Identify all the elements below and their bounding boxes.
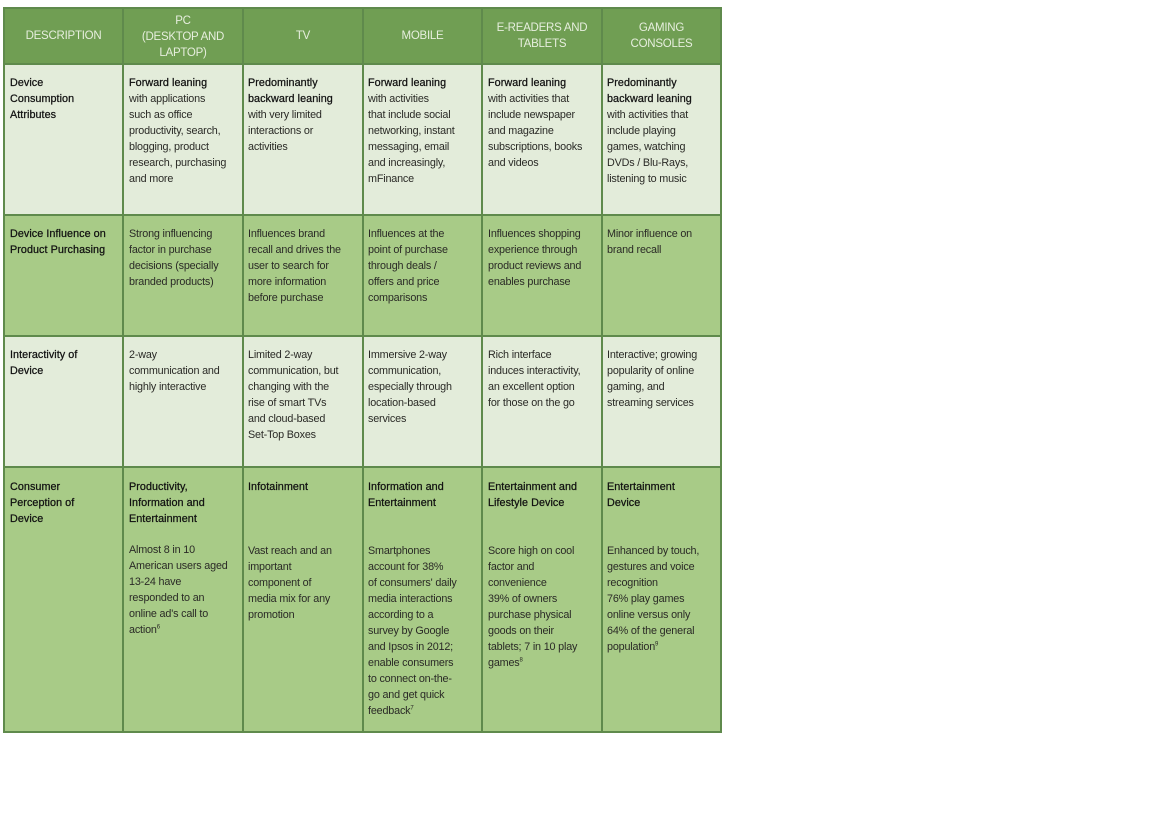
cell: TV interactivity (244, 337, 362, 466)
cell: TV interactivity: rise of smart TVs (248, 397, 326, 409)
cell: gaming consumption: listening to music (607, 173, 687, 185)
cell: TV influence: Influences brand (248, 228, 325, 240)
cell: tablets influence (483, 216, 601, 335)
cell: mobile perception: enable consumers (368, 657, 453, 669)
cell: tablets consumption (483, 65, 601, 214)
cell: mobile consumption (364, 65, 481, 214)
cell: PC consumption: research, purchasing (129, 157, 226, 169)
cell: tablets influence: Influences shopping (488, 228, 581, 240)
row label: consumer perception of device: Consumer (10, 481, 60, 493)
cell: gaming perception: gestures and voice (607, 561, 694, 573)
cell: gaming interactivity (603, 337, 720, 466)
cell: tablets consumption: include newspaper (488, 109, 575, 121)
cell: gaming consumption: with activities that (607, 109, 688, 121)
cell: mobile perception: according to a (368, 609, 433, 621)
cell: gaming consumption: Predominantly (607, 77, 677, 89)
cell: PC perception: American users aged (129, 560, 228, 572)
cell: PC consumption: and more (129, 173, 173, 185)
cell: PC perception (124, 468, 242, 731)
header: PC (124, 9, 242, 63)
cell: PC perception: 13-24 have (129, 576, 181, 588)
row label: device consumption attributes: Attributes (10, 109, 56, 121)
cell: TV interactivity: Limited 2-way (248, 349, 312, 361)
cell: TV consumption: activities (248, 141, 288, 153)
cell: tablets perception: goods on their (488, 625, 554, 637)
cell: tablets perception: purchase physical (488, 609, 571, 621)
cell: tablets perception (483, 468, 601, 731)
cell: PC interactivity (124, 337, 242, 466)
cell: TV interactivity: communication, but (248, 365, 338, 377)
cell: mobile perception: go and get quick (368, 689, 444, 701)
cell: tablets perception: games8 (488, 657, 523, 669)
cell: gaming perception (603, 468, 720, 731)
header: e-readers and tablets: TABLETS (518, 38, 566, 50)
header: mobile (364, 9, 481, 63)
cell: tablets influence: product reviews and (488, 260, 581, 272)
cell: PC influence: branded products) (129, 276, 214, 288)
cell: tablets interactivity: induces interactivity, (488, 365, 580, 377)
cell: PC interactivity: highly interactive (129, 381, 206, 393)
cell: tablets consumption: and magazine (488, 125, 554, 137)
cell: gaming influence (603, 216, 720, 335)
cell: TV influence (244, 216, 362, 335)
cell: PC perception: Information and (129, 497, 205, 509)
header: gaming consoles (603, 9, 720, 63)
cell: TV perception: media mix for any (248, 593, 330, 605)
cell: mobile perception: Information and (368, 481, 444, 493)
cell: mobile perception: media interactions (368, 593, 452, 605)
cell: PC influence: factor in purchase (129, 244, 212, 256)
cell: mobile influence (364, 216, 481, 335)
cell: PC interactivity: communication and (129, 365, 220, 377)
header: PC: PC (175, 15, 191, 27)
cell: TV consumption (244, 65, 362, 214)
cell: tablets influence: enables purchase (488, 276, 570, 288)
cell: gaming interactivity: Interactive; growing (607, 349, 697, 361)
cell: gaming perception: recognition (607, 577, 658, 589)
header: gaming consoles: CONSOLES (631, 38, 692, 50)
cell: mobile consumption: Forward leaning (368, 77, 446, 89)
cell: mobile interactivity: communication, (368, 365, 441, 377)
cell: mobile perception: account for 38% (368, 561, 443, 573)
cell: TV consumption: Predominantly (248, 77, 318, 89)
row label: device consumption attributes (5, 65, 122, 214)
cell: mobile interactivity: especially through (368, 381, 452, 393)
cell: mobile influence: Influences at the (368, 228, 444, 240)
cell: mobile perception: of consumers' daily (368, 577, 457, 589)
cell: gaming interactivity: gaming, and (607, 381, 664, 393)
cell: mobile influence: comparisons (368, 292, 427, 304)
cell: gaming consumption: DVDs / Blu-Rays, (607, 157, 688, 169)
cell: TV interactivity: changing with the (248, 381, 329, 393)
cell: tablets interactivity: for those on the go (488, 397, 575, 409)
cell: gaming perception: online versus only (607, 609, 690, 621)
cell: PC consumption: with applications (129, 93, 205, 105)
header: gaming consoles: GAMING (639, 22, 684, 34)
cell: mobile consumption: that include social (368, 109, 450, 121)
cell: tablets perception: factor and (488, 561, 534, 573)
cell: mobile perception: feedback7 (368, 705, 414, 717)
cell: TV perception: important (248, 561, 291, 573)
cell: tablets perception: Score high on cool (488, 545, 574, 557)
row label: consumer perception of device (5, 468, 122, 731)
cell: gaming interactivity: popularity of online (607, 365, 694, 377)
cell: PC perception: responded to an (129, 592, 204, 604)
cell: mobile interactivity: Immersive 2-way (368, 349, 447, 361)
cell: TV influence: recall and drives the (248, 244, 341, 256)
cell: PC perception: Productivity, (129, 481, 188, 493)
cell: tablets perception: convenience (488, 577, 547, 589)
cell: mobile perception: and Ipsos in 2012; (368, 641, 453, 653)
cell: PC influence (124, 216, 242, 335)
cell: mobile influence: point of purchase (368, 244, 448, 256)
header: description (5, 9, 122, 63)
cell: gaming perception: Enhanced by touch, (607, 545, 699, 557)
cell: TV perception: promotion (248, 609, 294, 621)
cell: gaming perception: Device (607, 497, 640, 509)
cell: gaming consumption: backward leaning (607, 93, 692, 105)
cell: TV consumption: with very limited (248, 109, 322, 121)
cell: PC perception: Almost 8 in 10 (129, 544, 195, 556)
cell: PC perception: online ad's call to (129, 608, 208, 620)
cell: tablets perception: Entertainment and (488, 481, 577, 493)
cell: TV perception: Vast reach and an (248, 545, 332, 557)
row label: interactivity of device: Device (10, 365, 43, 377)
row label: device influence on product purchasing (5, 216, 122, 335)
cell: tablets consumption: Forward leaning (488, 77, 566, 89)
cell: tablets interactivity (483, 337, 601, 466)
cell: mobile perception: survey by Google (368, 625, 449, 637)
cell: PC perception: Entertainment (129, 513, 197, 525)
header: PC: (DESKTOP AND (142, 31, 224, 43)
cell: TV interactivity: and cloud-based (248, 413, 325, 425)
cell: gaming consumption: games, watching (607, 141, 685, 153)
cell: PC influence: Strong influencing (129, 228, 212, 240)
cell: mobile perception: Entertainment (368, 497, 436, 509)
row label: consumer perception of device: Perception of (10, 497, 74, 509)
cell: tablets perception: tablets; 7 in 10 play (488, 641, 577, 653)
header: PC: LAPTOP) (159, 47, 207, 59)
cell: mobile consumption: networking, instant (368, 125, 455, 137)
header: description: DESCRIPTION (26, 30, 101, 42)
cell: mobile influence: offers and price (368, 276, 439, 288)
row label: device influence on product purchasing: Device Influence on (10, 228, 106, 240)
cell: gaming consumption (603, 65, 720, 214)
cell: tablets interactivity: an excellent option (488, 381, 575, 393)
cell: TV perception: Infotainment (248, 481, 308, 493)
cell: TV influence: user to search for (248, 260, 329, 272)
header: e-readers and tablets (483, 9, 601, 63)
cell: PC interactivity: 2-way (129, 349, 157, 361)
cell: mobile perception: Smartphones (368, 545, 430, 557)
cell: gaming perception: population9 (607, 641, 658, 653)
cell: PC consumption: blogging, product (129, 141, 209, 153)
row label: device consumption attributes: Device (10, 77, 43, 89)
cell: tablets perception: Lifestyle Device (488, 497, 564, 509)
cell: tablets consumption: with activities that (488, 93, 569, 105)
cell: TV interactivity: Set-Top Boxes (248, 429, 316, 441)
cell: tablets influence: experience through (488, 244, 577, 256)
row label: device influence on product purchasing: Product Purchasing (10, 244, 105, 256)
cell: mobile consumption: and increasingly, (368, 157, 445, 169)
cell: TV influence: more information (248, 276, 326, 288)
cell: gaming consumption: include playing (607, 125, 676, 137)
cell: gaming influence: Minor influence on (607, 228, 692, 240)
cell: tablets consumption: subscriptions, books (488, 141, 582, 153)
cell: gaming perception: Entertainment (607, 481, 675, 493)
comparison table (3, 7, 722, 733)
cell: gaming perception: 64% of the general (607, 625, 694, 637)
cell: TV influence: before purchase (248, 292, 323, 304)
cell: TV perception (244, 468, 362, 731)
cell: tablets perception: 39% of owners (488, 593, 557, 605)
cell: PC perception: action6 (129, 624, 160, 636)
cell: TV consumption: backward leaning (248, 93, 333, 105)
cell: mobile perception (364, 468, 481, 731)
cell: mobile interactivity (364, 337, 481, 466)
header: TV (244, 9, 362, 63)
cell: TV perception: component of (248, 577, 311, 589)
cell: mobile perception: to connect on-the- (368, 673, 452, 685)
cell: TV consumption: interactions or (248, 125, 313, 137)
cell: gaming interactivity: streaming services (607, 397, 694, 409)
header: mobile: MOBILE (402, 30, 443, 42)
cell: tablets interactivity: Rich interface (488, 349, 552, 361)
cell: PC consumption: Forward leaning (129, 77, 207, 89)
row label: device consumption attributes: Consumption (10, 93, 74, 105)
cell: mobile consumption: messaging, email (368, 141, 449, 153)
cell: mobile influence: through deals / (368, 260, 437, 272)
cell: gaming perception: 76% play games (607, 593, 684, 605)
row label: interactivity of device (5, 337, 122, 466)
cell: PC influence: decisions (specially (129, 260, 218, 272)
header: TV: TV (296, 30, 310, 42)
cell: mobile interactivity: services (368, 413, 406, 425)
cell: mobile interactivity: location-based (368, 397, 436, 409)
cell: mobile consumption: mFinance (368, 173, 414, 185)
cell: mobile consumption: with activities (368, 93, 429, 105)
cell: tablets consumption: and videos (488, 157, 538, 169)
cell: PC consumption (124, 65, 242, 214)
cell: PC consumption: productivity, search, (129, 125, 220, 137)
header: e-readers and tablets: E-READERS AND (497, 22, 587, 34)
cell: PC consumption: such as office (129, 109, 192, 121)
row label: interactivity of device: Interactivity of (10, 349, 77, 361)
row label: consumer perception of device: Device (10, 513, 43, 525)
cell: gaming influence: brand recall (607, 244, 661, 256)
